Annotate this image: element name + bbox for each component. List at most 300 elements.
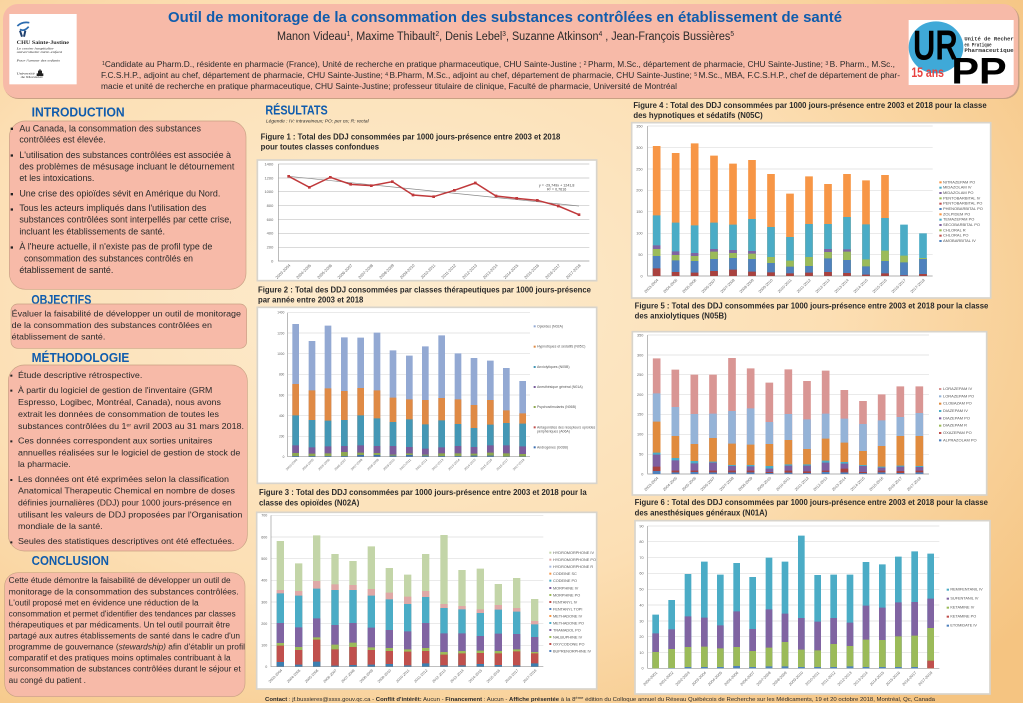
figure 5: 2014-2015	[850, 476, 866, 492]
affiliations: Pharm, M.Sc., département de pharmacie, CHU Sainte-Justine;	[588, 60, 825, 69]
figure 1: 2015-2016	[523, 262, 541, 280]
figure 1: 2003-2004	[274, 262, 292, 280]
figure 4: 100	[636, 232, 643, 236]
figure 3: 2009-2010	[377, 669, 392, 684]
figure 6: 20	[639, 635, 644, 639]
figure 2: 2004-2005	[301, 458, 315, 471]
logo: CHU Sainte-Justine: de Montréal	[21, 75, 43, 79]
legend	[947, 588, 983, 628]
figure 5: Figure 5 : Total des DDJ consommées par 1000 jours-présence entre 2003 et 2018 pour la classe	[635, 301, 989, 310]
section: méthodologie: la pharmacie.	[18, 459, 71, 469]
figure 2: 2014-2015	[463, 458, 477, 471]
figure 6: 2010-2011	[805, 671, 820, 686]
legend: MORPHINE IV	[553, 586, 579, 590]
section: objectifs: établissement de santé.	[12, 332, 105, 342]
figure 2: 400	[279, 414, 285, 418]
figure 4: 200	[636, 189, 643, 193]
logo: URPP 15 ans: 15 ans	[911, 64, 944, 80]
figure 3: classe des opioïdes (N02A)	[259, 498, 360, 507]
figure 6: 2013-2014	[853, 670, 869, 687]
legend: CHLORAL PO	[943, 233, 969, 238]
legend: Hypnotiques et sédatifs (N05C)	[537, 345, 585, 349]
figure 4: 2005-2006	[682, 278, 697, 294]
logo: URPP 15 ans: Unité de Recher	[964, 37, 1014, 43]
figure 6: 50	[639, 588, 644, 592]
figure 1: 2011-2012	[440, 262, 458, 280]
figure 3: 2012-2013	[432, 669, 447, 684]
affiliations: F.C.S.H.P., adjoint au chef, département de pharmacie, CHU Sainte-Justine;	[101, 71, 371, 80]
figure 6: 40	[639, 603, 644, 607]
legend: Psychostimulants (N06B)	[537, 405, 576, 409]
affiliations: 1	[102, 61, 105, 67]
legend: MIDAZOLAM PO	[943, 190, 974, 195]
figure 1: 2012-2013	[461, 262, 479, 280]
figure 2: 2017-2018	[512, 458, 526, 471]
figure 4: 50	[638, 253, 643, 257]
legend	[939, 179, 983, 243]
figure 1: 200	[267, 245, 274, 250]
header banner	[3, 4, 1020, 99]
legend: FENTANYL IV	[553, 600, 578, 604]
figure 5: 2005-2006	[681, 476, 697, 492]
figure 1: 2013-2014	[482, 262, 499, 280]
legend: HYDROMORPHONE PO	[553, 558, 596, 562]
figure 6: 2007-2008	[756, 671, 772, 687]
legend: BUPRENORPHINE IV	[553, 649, 592, 653]
figure 2: 1200	[277, 331, 285, 335]
section: méthodologie: Ces données correspondent aux sorties unitaires	[18, 436, 213, 446]
figure 5: 2008-2009	[738, 476, 753, 492]
section: méthodologie: annuelles réalisées sur le logiciel de gestion de stock de	[18, 447, 241, 457]
legend: CODEINE PO	[553, 579, 577, 583]
footer: ème	[575, 695, 584, 700]
figure 2: 2003-2004	[285, 458, 299, 471]
figure 5: 150	[637, 413, 643, 417]
figure 2: 800	[279, 373, 285, 377]
figure 3: 700	[261, 514, 267, 518]
legend: NALBUPHINE IV	[553, 635, 583, 639]
legend: METHADONE IV	[553, 614, 583, 618]
figure 4: 350	[636, 124, 643, 128]
authors: 4	[599, 31, 602, 38]
figure 5: 100	[637, 433, 643, 437]
section: introduction: L'utilisation des substances contrôlées est associée à	[19, 150, 231, 160]
figure 5: 50	[639, 453, 643, 457]
figure 1	[257, 132, 597, 281]
figure 4: 0	[641, 274, 643, 278]
figure 2: 2012-2013	[431, 458, 445, 471]
section: introduction: des problèmes de mésusage incluant le détournement	[19, 161, 235, 171]
figure 6: 70	[639, 556, 644, 560]
authors: , Maxime Thibault	[350, 31, 436, 43]
figure 6: 2001-2002	[659, 671, 674, 687]
logo: URPP 15 ans	[909, 20, 1014, 91]
figure 4: 300	[636, 146, 643, 150]
figure 6: 2017-2018	[918, 671, 933, 687]
legend: OXYCODONE PO	[553, 642, 585, 646]
logo: URPP 15 ans: UR	[913, 21, 958, 68]
section: conclusion: surconsommation de substances contrôlées durant le séjour et	[9, 665, 241, 674]
figure 4: 2014-2015	[853, 278, 869, 294]
figure 1: 800	[267, 203, 274, 208]
figure 5: 2011-2012	[794, 476, 810, 492]
footer: Contact : jf.bussieres@ssss.gouv.qc.ca - Conflit d'intérêt: Aucun - Financement : Aucun - Affiche présentée à la 8	[265, 697, 575, 703]
authors: 2	[435, 31, 439, 38]
figure 6: 2005-2006	[724, 671, 739, 687]
section: méthodologie: Les données ont été exprimées selon la classification	[18, 474, 229, 484]
section: conclusion: comparatif et des pratiques moins optimales contribuant à la	[9, 654, 231, 663]
logo: CHU Sainte-Justine: CHU Sainte-Justine	[17, 41, 70, 46]
legend: TRAMADOL PO	[553, 628, 581, 632]
legend: Androgènes (G03B)	[537, 445, 568, 449]
logo: URPP 15 ans: en Pratique	[964, 42, 992, 48]
section: méthodologie: Seules des statistiques descriptives ont été effectuées.	[18, 536, 234, 546]
figure 3: 400	[261, 579, 267, 583]
legend: ALPRAZOLAM PO	[943, 437, 977, 442]
legend: Anxiolytiques (N05B)	[537, 365, 570, 369]
figure 1: 2006-2007	[336, 262, 354, 280]
figure 1: pour toutes classes confondues	[261, 143, 380, 152]
figure 4	[632, 101, 991, 298]
figure 2: 2015-2016	[480, 458, 493, 471]
figure 6: 30	[639, 619, 644, 623]
figure 2: 600	[279, 393, 285, 397]
section: méthodologie: À partir du logiciel de gestion de l'inventaire (GRM	[18, 385, 212, 395]
figure 3: 2003-2004	[268, 669, 283, 684]
section: méthodologie: utilisant les valeurs de DDJ proposées par l'Organisation	[18, 509, 243, 519]
figure 6: 2014-2015	[869, 671, 885, 687]
figure 2: 2007-2008	[350, 458, 364, 471]
authors: Manon Videau	[277, 31, 351, 43]
figure 6: 90	[639, 524, 644, 528]
figure 2: 2009-2010	[382, 458, 396, 471]
legend: MORPHINE PO	[553, 593, 580, 597]
legend: Anesthésique général (N01A)	[537, 385, 583, 389]
figure 2: 0	[283, 455, 285, 459]
section: introduction: et les intoxications.	[19, 173, 94, 183]
figure 2: 2013-2014	[447, 458, 461, 471]
figure 4: 2012-2013	[815, 278, 831, 294]
figure 4: 2008-2009	[739, 278, 755, 294]
legend: TEMAZEPAM PO	[943, 217, 974, 222]
figure 5: 250	[637, 373, 643, 377]
section: objectifs: de la consommation des substances contrôlées en	[12, 320, 212, 330]
figure 4: 2010-2011	[777, 278, 793, 294]
section: introduction: incluant les établissements de santé.	[19, 226, 165, 236]
section: conclusion: Cette étude démontre la faisabilité de développer un outil de	[9, 576, 231, 585]
legend: PHENOBARBITAL PO	[943, 206, 983, 211]
figure 6: 10	[639, 651, 644, 655]
figure 5: 200	[637, 393, 643, 397]
figure 2: 2016-2017	[496, 458, 509, 471]
figure 6: 2004-2005	[707, 671, 723, 687]
section heading: résultats: Légende : IV: intraveineux; PO: per os; R: rectal	[266, 118, 370, 124]
figure 4: 2009-2010	[758, 278, 774, 294]
figure 5: 2004-2005	[662, 476, 678, 492]
figure 1: 1400	[264, 161, 274, 166]
figure 2: Figure 2 : Total des DDJ consommées par classes thérapeutiques par 1000 jours-présence	[258, 285, 592, 294]
figure 3: 100	[261, 644, 267, 648]
legend: CLOBAZAM PO	[943, 401, 972, 406]
section: objectifs	[11, 292, 247, 348]
figure 3: 2010-2011	[395, 669, 410, 684]
figure 6: des anesthésiques généraux (N01A)	[635, 508, 768, 517]
figure 4: 2003-2004	[644, 278, 660, 294]
figure 6: 0	[642, 667, 644, 671]
section: méthodologie: substances contrôlées du 1	[18, 421, 123, 431]
figure 4: 2017-2018	[910, 278, 926, 294]
legend: Antagonistes des récepteurs opioïdes	[537, 425, 596, 429]
section: conclusion: CONCLUSION	[32, 553, 109, 568]
section: méthodologie: mondiale de la santé.	[18, 521, 103, 531]
legend: CHLORAL R	[943, 227, 966, 232]
legend: KETAMINE PO	[950, 615, 976, 619]
logo: CHU Sainte-Justine: Université	[17, 72, 36, 76]
section: introduction: À l'heure actuelle, il n'existe pas de profil type de	[19, 242, 212, 252]
figure 5: 2010-2011	[775, 476, 791, 492]
section: conclusion: L'outil proposé met en évidence une réduction de la	[9, 598, 199, 607]
figure 2	[257, 285, 597, 483]
affiliations	[101, 60, 900, 91]
affiliations: 3	[825, 61, 830, 67]
legend: PENTOBARBITAL PO	[943, 201, 982, 206]
legend: OXAZEPAM PO	[943, 430, 972, 435]
figure 4: Figure 4 : Total des DDJ consommées par 1000 jours-présence entre 2003 et 2018 pour la classe	[633, 101, 987, 110]
section: introduction: substances contrôlées sont interpellés par cette crise,	[19, 215, 232, 225]
section: méthodologie: Espresso, Logibec, Montréal, Canada), nous avons	[18, 397, 222, 407]
figure 4: des hypnotiques et sédatifs (N05C)	[633, 111, 763, 120]
figure 1: 1000	[264, 189, 274, 194]
figure 1: 2007-2008	[357, 262, 375, 280]
figure 4: 2015-2016	[872, 278, 888, 294]
authors: , Jean-François Bussières	[602, 31, 731, 43]
legend: LORAZEPAM IV	[943, 386, 972, 391]
figure 3: 2004-2005	[286, 669, 301, 684]
legend: LORAZEPAM PO	[943, 393, 974, 398]
section: introduction: contrôlées est élevée.	[19, 135, 106, 145]
logo: CHU Sainte-Justine: Pour l'amour des enfants	[15, 59, 61, 63]
section: introduction: Tous les acteurs impliqués dans l'utilisation des	[19, 203, 207, 213]
legend: ETOMIDATE IV	[950, 624, 977, 628]
section: conclusion: thérapeutiques et par médicaments. Un tel outil pourrait être	[9, 620, 231, 629]
logo: CHU Sainte-Justine: Le centre hospitalier	[15, 46, 55, 50]
figure 5: 2003-2004	[644, 476, 660, 492]
legend: HYDROMORPHONE IV	[553, 551, 594, 555]
figure 3: Figure 3 : Total des DDJ consommées par 1000 jours-présence entre 2003 et 2018 pour la	[259, 488, 587, 497]
figure 5: 0	[641, 472, 643, 476]
figure 3: 2007-2008	[341, 669, 356, 684]
figure 6: 2003-2004	[691, 670, 708, 687]
figure 2: 200	[279, 435, 285, 439]
figure 3: 2015-2016	[486, 669, 501, 684]
figure 6: 2000-2001	[643, 671, 658, 687]
figure 1: Figure 1 : Total des DDJ consommées par 1000 jours-présence entre 2003 et 2018	[261, 132, 561, 141]
legend: Opioïdes (N02A)	[537, 324, 563, 328]
figure 3: 2014-2015	[468, 669, 483, 684]
figure 6: 80	[639, 540, 644, 544]
figure 3: 2017-2018	[522, 669, 537, 684]
figure 6: 2015-2016	[885, 671, 901, 687]
section: méthodologie: er	[126, 422, 131, 428]
figure 1: 2010-2011	[420, 262, 437, 280]
figure 6: 2008-2009	[772, 671, 788, 687]
figure 3: 2011-2012	[413, 669, 428, 684]
legend: périphériques (A06A)	[537, 430, 570, 434]
figure 3: 2013-2014	[450, 669, 465, 684]
figure 5	[632, 301, 989, 495]
legend: PENTOBARBITAL IV	[943, 195, 981, 200]
figure 1: 0	[271, 258, 274, 263]
logo: URPP 15 ans: Pharmaceutique	[964, 48, 1014, 54]
figure 4: 2016-2017	[891, 278, 907, 294]
legend: NITRAZEPAM PO	[943, 179, 975, 184]
affiliations: macie et unité de recherche en pratique pharmaceutique, CHU Sainte-Justine; professeur titulaire de clinique, Faculté de pharmacie, Université de Montréal	[101, 82, 677, 91]
footer: édition du Colloque annuel du Réseau Québécois de Recherche sur les Médicaments, 19 et 20 octobre 2018, Montréal, Qc, Canada	[583, 697, 936, 703]
figure 4: 150	[636, 210, 643, 214]
figure 3: 0	[265, 665, 267, 669]
section: conclusion	[5, 553, 245, 697]
affiliations: 2	[584, 61, 588, 67]
section: conclusion: partagé aux autres établissements de santé dans le cadre d'un	[9, 631, 240, 640]
affiliations: 5	[694, 72, 699, 78]
legend: AMOBARBITAL IV	[943, 238, 976, 243]
title: Outil de monitorage de la consommation des substances contrôlées en établissement de santé	[168, 10, 842, 26]
section: méthodologie: avril 2003 au 31 mars 2018.	[131, 421, 244, 431]
figure 3	[257, 488, 597, 689]
figure 3: 2016-2017	[504, 669, 519, 684]
figure 1: 2009-2010	[399, 262, 416, 280]
affiliations: 4	[385, 72, 389, 78]
figure 6: 60	[639, 572, 644, 576]
legend: HYDROMORPHONE R	[553, 565, 593, 569]
affiliations: Candidate au Pharm.D., résidente en pharmacie (France), Unité de recherche en pratique pharmaceutique, CHU Sainte-Justine ;	[105, 60, 584, 69]
section heading: résultats	[265, 103, 370, 124]
figure 3: 2006-2007	[323, 669, 338, 684]
figure 2: par année entre 2003 et 2018	[258, 296, 364, 305]
figure 5: 2015-2016	[869, 476, 884, 492]
figure 1: 2008-2009	[378, 262, 396, 280]
section: introduction: établissement de santé.	[19, 265, 113, 275]
figure 3: 300	[261, 600, 267, 604]
authors: 1	[347, 31, 350, 38]
legend	[549, 551, 596, 653]
figure 1: 2016-2017	[544, 262, 562, 280]
section: méthodologie	[8, 350, 247, 551]
figure 6: 2009-2010	[788, 671, 804, 687]
figure 6: 2006-2007	[740, 671, 755, 687]
figure 5: 2007-2008	[719, 476, 735, 492]
figure 3: 600	[261, 535, 267, 539]
legend: MIDAZOLAM IV	[943, 185, 972, 190]
legend: DIAZEPAM PO	[943, 415, 970, 420]
figure 6: 2016-2017	[902, 671, 917, 687]
section: méthodologie: Anatomical Therapeutic Chemical en nombre de doses	[18, 486, 236, 496]
legend: DIAZEPAM IV	[943, 408, 968, 413]
legend: REMIFENTANIL IV	[950, 588, 983, 592]
affiliations: B.Pharm, M.Sc., adjoint au chef, département de pharmacie, CHU Sainte-Justine;	[389, 71, 694, 80]
figure 5: 2006-2007	[700, 476, 716, 492]
figure 1: 400	[267, 231, 274, 236]
figure 6: 2011-2012	[821, 671, 836, 686]
figure 1: y = -29,749x + 1241,8	[539, 183, 574, 187]
section: méthodologie: Étude descriptive rétrospective.	[18, 370, 142, 380]
section: introduction: INTRODUCTION	[32, 104, 125, 119]
legend: FENTANYL TOPI	[553, 607, 582, 611]
figure 4: 2004-2005	[663, 278, 678, 294]
figure 6: 2012-2013	[837, 671, 853, 687]
figure 4: 250	[636, 167, 643, 171]
figure 5: 350	[637, 333, 643, 337]
figure 1: 2004-2005	[295, 262, 313, 280]
legend: SUFENTANIL IV	[950, 597, 979, 601]
figure 2: 2011-2012	[415, 458, 428, 471]
figure 5: 2013-2014	[831, 476, 848, 492]
affiliations: B. Pharm., M.Sc.,	[830, 60, 895, 69]
section: introduction	[9, 104, 246, 289]
figure 1: 2005-2006	[316, 262, 334, 280]
figure 1: 2014-2015	[502, 262, 520, 280]
legend	[534, 324, 596, 449]
section: conclusion: consommation et permet d'identifier des tendances par classes	[9, 609, 236, 618]
legend: KETAMINE IV	[950, 606, 975, 610]
figure 2: 2008-2009	[366, 458, 380, 471]
authors: , Suzanne Atkinson	[506, 31, 599, 43]
section: méthodologie: extrait les données de consommation de toutes les	[18, 409, 220, 419]
figure 4: 2013-2014	[834, 278, 850, 294]
section: objectifs: OBJECTIFS	[31, 292, 92, 307]
figure 5: 300	[637, 353, 643, 357]
section: méthodologie: MÉTHODOLOGIE	[32, 350, 130, 365]
figure 3: 500	[261, 557, 267, 561]
section: conclusion: programme de gouvernance (stewardship) afin d'établir un profil	[9, 643, 245, 652]
section: introduction: Une crise des opioïdes sévit en Amérique du Nord.	[19, 188, 220, 198]
legend	[939, 386, 977, 442]
figure 1: 600	[267, 217, 274, 222]
figure 2: 2010-2011	[399, 458, 412, 471]
section: méthodologie: définies journalières (DDJ) pour 1000 jours-présence en	[18, 497, 232, 507]
legend: ZOLPIDEM PO	[943, 211, 970, 216]
authors: 3	[502, 31, 506, 38]
section: conclusion: monitorage de la consommation des substances contrôlées.	[9, 587, 239, 596]
figure 1: 2017-2018	[565, 262, 582, 280]
figure 2: 2005-2006	[317, 458, 331, 471]
logo: CHU Sainte-Justine	[9, 14, 77, 84]
legend: DIAZEPAM R	[943, 423, 967, 428]
figure 5: 2016-2017	[887, 476, 903, 492]
section: objectifs: Évaluer la faisabilité de développer un outil de monitorage	[12, 308, 241, 318]
section: introduction: Au Canada, la consommation des substances	[19, 123, 201, 133]
figure 2: 1400	[277, 311, 285, 315]
figure 4: 2006-2007	[701, 278, 717, 294]
legend: METHADONE PO	[553, 621, 584, 625]
logo: URPP 15 ans: PP	[951, 50, 1007, 91]
legend: SECOBARBITAL PO	[943, 222, 980, 227]
figure 3: 2008-2009	[359, 669, 374, 684]
figure 5: 2017-2018	[906, 476, 922, 492]
figure 2: 1000	[277, 352, 285, 356]
authors: 5	[730, 31, 734, 38]
legend: CODEINE SC	[553, 572, 577, 576]
figure 3: 200	[261, 622, 267, 626]
affiliations: M.Sc., MBA, F.C.S.H.P., chef de département de phar-	[699, 71, 900, 80]
figure 6	[635, 498, 990, 694]
logo: CHU Sainte-Justine: universitaire mère-enfant	[17, 50, 62, 54]
figure 5: 2012-2013	[813, 476, 828, 492]
figure 6: 2002-2003	[675, 671, 691, 687]
figure 4: 2011-2012	[796, 278, 812, 294]
figure 5: 2009-2010	[756, 476, 772, 492]
figure 3: 2005-2006	[304, 669, 319, 684]
